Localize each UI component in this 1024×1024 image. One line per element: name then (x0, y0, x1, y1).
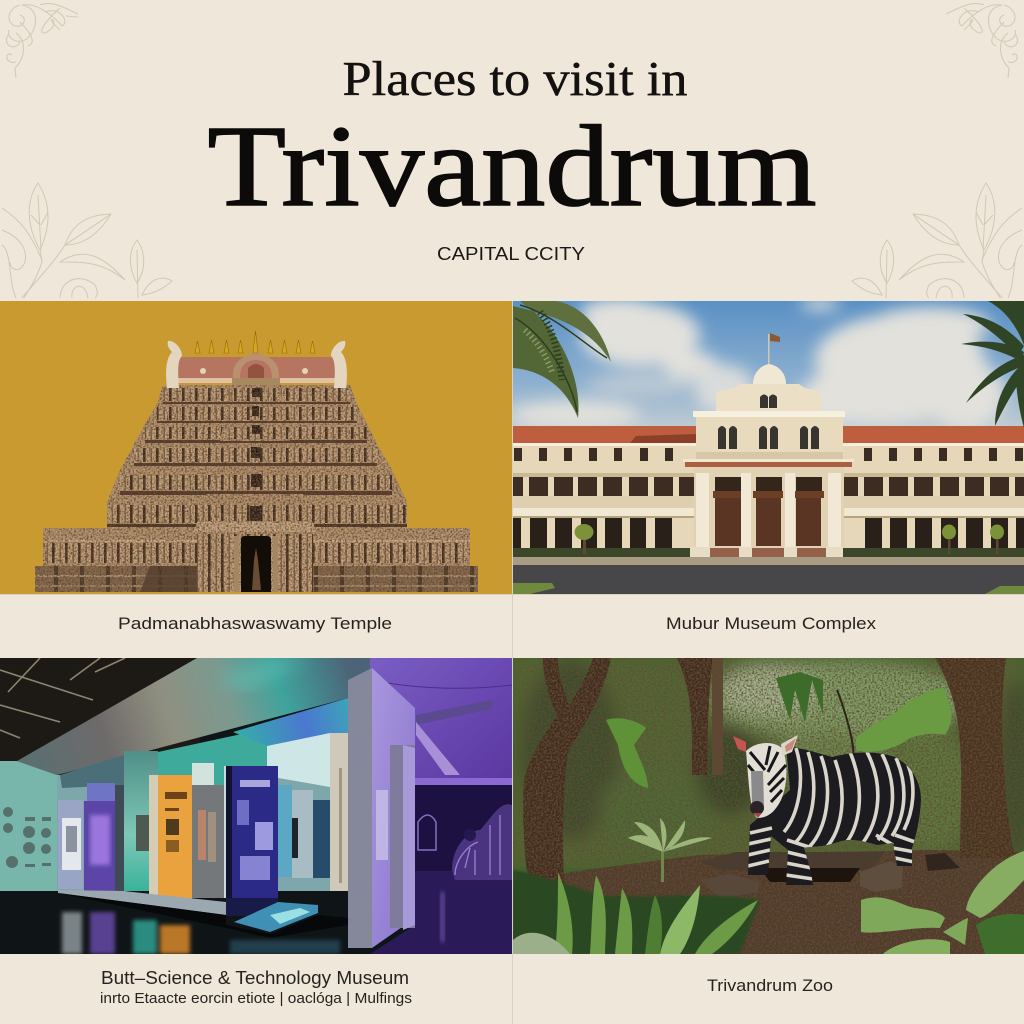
back gallery (57, 698, 348, 898)
museum upper windows (514, 448, 1023, 461)
temple doorway (234, 536, 278, 592)
ground (513, 850, 1024, 954)
road and lawn (513, 524, 1024, 594)
palm right (961, 301, 1024, 428)
museum lower arcade (513, 518, 1024, 548)
caption: Science and Technology Museum: Butt–Science & Technology Museum (101, 968, 409, 988)
temple central tower (194, 383, 316, 592)
panel: Trivandrum Zoo image (513, 658, 1024, 954)
caption: Padmanabhaswaswamy Temple: Padmanabhaswaswamy Temple (118, 614, 392, 633)
zebra (733, 735, 925, 888)
subtitle: CAPITAL CCITY (437, 243, 585, 264)
museum wings (513, 426, 1024, 550)
panel dividers (0, 301, 1024, 1024)
caption: Science and Technology Museum (100, 968, 412, 1007)
floor reflections (62, 912, 340, 954)
ornament: top-left corner scroll (6, 3, 78, 78)
clouds (510, 298, 1005, 430)
panel: Museum Complex image (510, 298, 1024, 594)
caption: Trivandrum Zoo: Trivandrum Zoo (707, 976, 833, 995)
teal side wall (0, 761, 57, 891)
ornament: left floral sprig (2, 183, 172, 298)
caption: Mubur Museum Complex: Mubur Museum Complex (666, 614, 877, 633)
platform and glass plinth (58, 890, 348, 938)
title line: Places to visit in: Places to visit in (342, 51, 688, 106)
temple finials (195, 331, 315, 353)
fern (628, 818, 712, 882)
upper leaves (606, 672, 951, 788)
temple roof (166, 341, 347, 388)
panel: Science and Technology Museum image (0, 658, 512, 954)
title: Trivandrum: Trivandrum (208, 103, 816, 231)
foliage backdrop (513, 658, 1024, 868)
temple tower and base (35, 385, 478, 592)
wall artifacts (3, 807, 51, 868)
purple hall (370, 658, 512, 954)
rocks (700, 852, 960, 899)
museum middle windows (513, 477, 1024, 496)
caption: Science and Technology Museum: inrto Etaacte eorcin etiote | oaclóga | Mulfings (100, 991, 412, 1007)
palm left (513, 301, 611, 418)
display panels (58, 751, 278, 916)
museum central block (683, 364, 854, 561)
zebra stripes (748, 748, 915, 879)
trees (523, 658, 1018, 898)
ornament: right floral sprig (852, 183, 1022, 298)
ceiling (0, 658, 370, 775)
flag (768, 333, 780, 364)
front foliage (513, 851, 1024, 954)
ornament: top-right corner scroll (946, 3, 1018, 78)
panel: Padmanabhaswamy Temple image (0, 301, 512, 594)
pillar (348, 668, 415, 948)
